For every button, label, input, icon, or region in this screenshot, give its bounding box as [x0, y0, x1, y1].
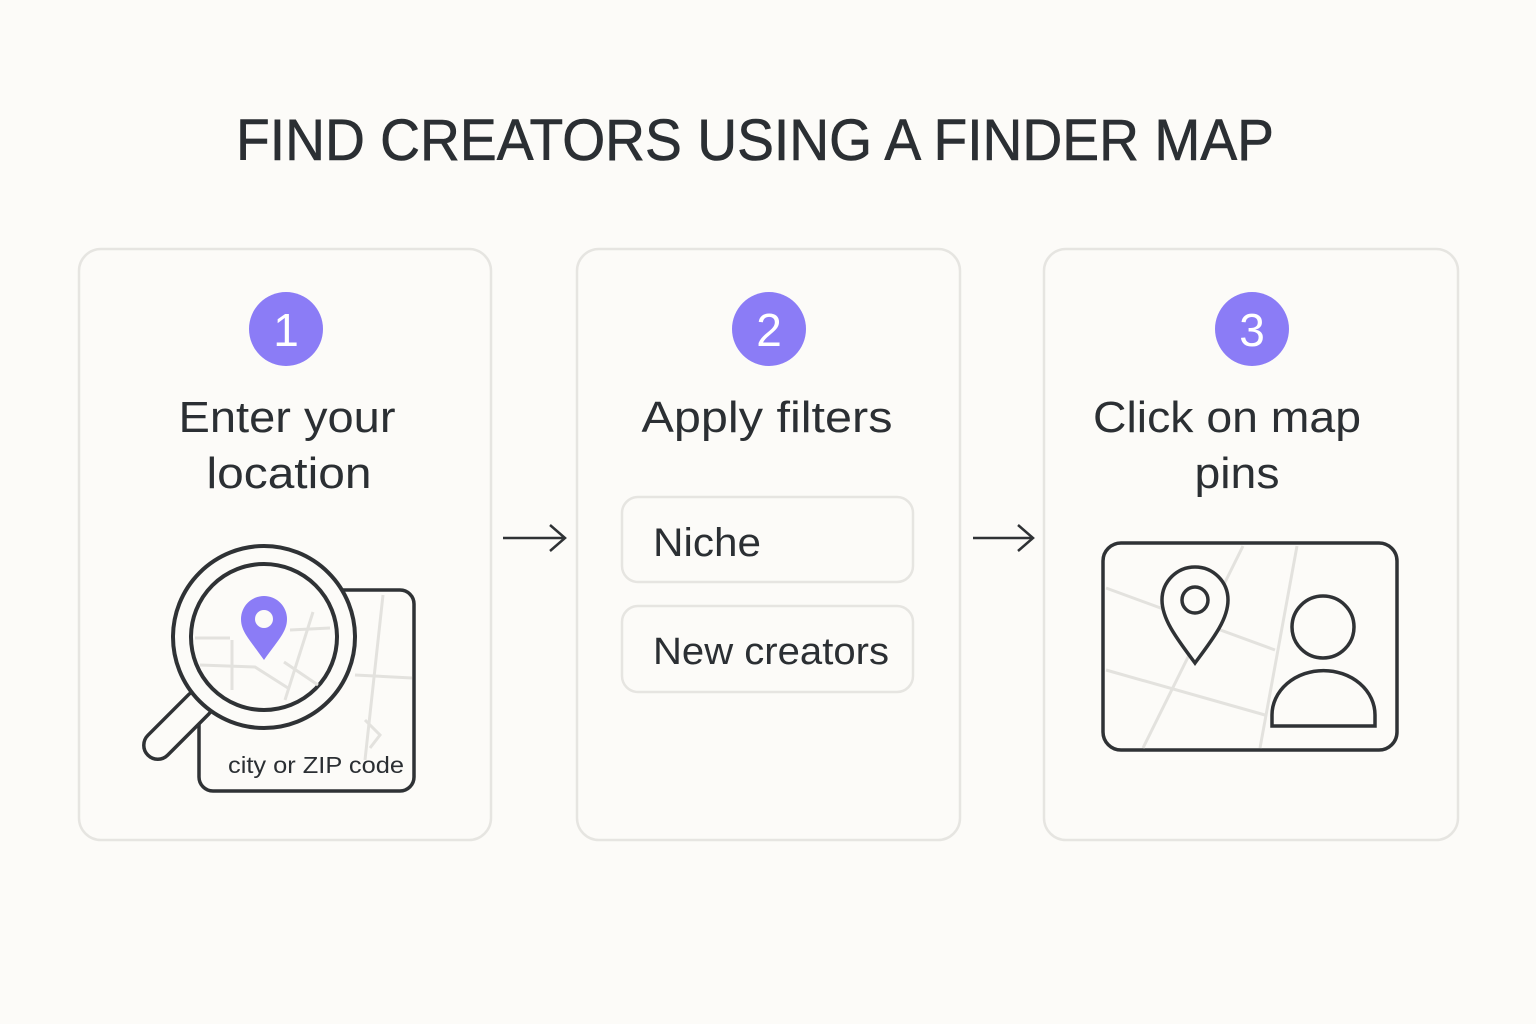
step 1 heading: Enter your	[178, 393, 396, 442]
step 3 badge: 3	[1239, 304, 1265, 356]
step 2 badge	[732, 292, 806, 366]
step 2 badge: 2	[756, 304, 782, 356]
filter: niche: Niche	[653, 521, 761, 565]
step 3 heading: pins	[1194, 449, 1280, 498]
filter: new creators: New creators	[653, 631, 889, 673]
filter: niche	[622, 497, 913, 582]
title: FIND CREATORS USING A FINDER MAP	[236, 108, 1274, 173]
step 3 badge	[1215, 292, 1289, 366]
filter: new creators	[622, 606, 913, 692]
step 3 heading: Click on map	[1093, 393, 1361, 442]
arrow 1	[503, 525, 565, 551]
step 1 heading	[178, 393, 396, 498]
step 1 badge	[249, 292, 323, 366]
arrow 2	[973, 525, 1033, 551]
step 3 heading	[1093, 393, 1361, 498]
icon: map with pin and person	[1103, 543, 1397, 750]
step 1 badge: 1	[273, 304, 299, 356]
panel: step 1	[79, 249, 491, 840]
step 2 heading: Apply filters	[642, 393, 892, 442]
icon: magnifier over map	[138, 546, 414, 791]
panel: step 3	[1044, 249, 1458, 840]
icon: magnifier over map: city or ZIP code	[228, 752, 404, 778]
step 1 heading: location	[206, 449, 372, 498]
panel: step 2	[577, 249, 960, 840]
